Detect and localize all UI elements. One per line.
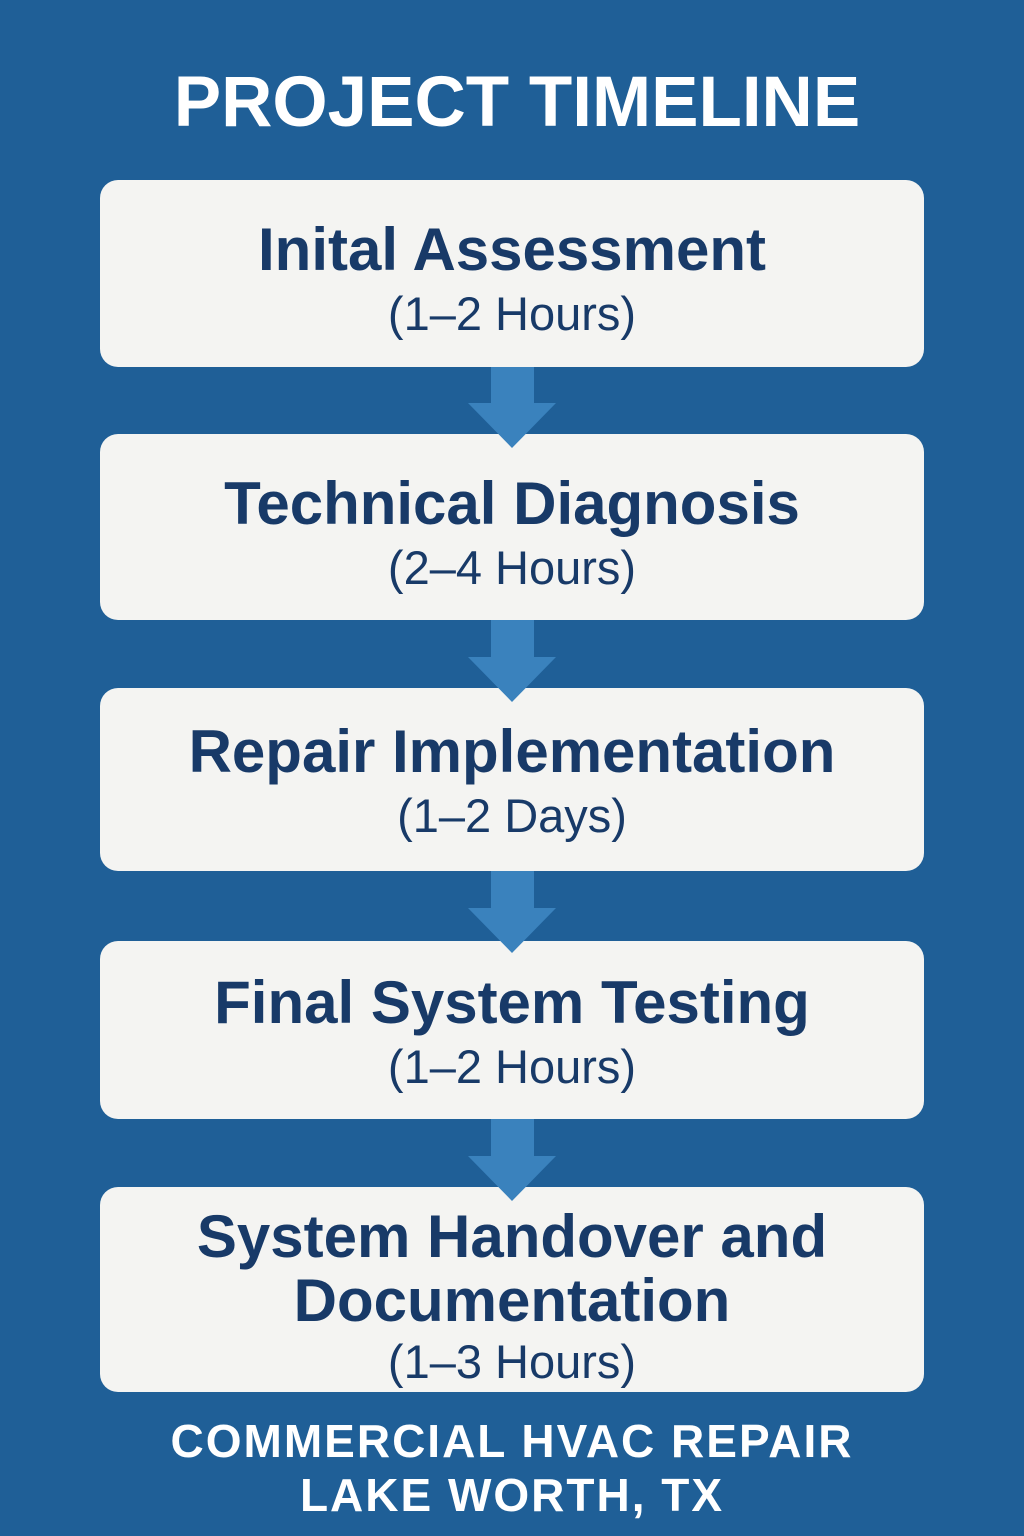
panel: step 5: Documentation [294, 1267, 730, 1334]
footer [171, 1415, 853, 1521]
panel: step 4: (1–2 Hours) [388, 1040, 636, 1093]
arrow 1 [468, 367, 556, 448]
panel: step 5: (1–3 Hours) [388, 1335, 636, 1388]
panel: step 2: (2–4 Hours) [388, 541, 636, 594]
panel: step 3: (1–2 Days) [397, 789, 627, 842]
panel: step 1: (1–2 Hours) [388, 287, 636, 340]
panel: step 3 [100, 688, 924, 871]
panel: step 5 [100, 1187, 924, 1392]
panel: step 4: Final System Testing [214, 969, 810, 1036]
panel: step 5: System Handover and [197, 1203, 827, 1270]
panel: step 2 [100, 434, 924, 620]
panel: step 1 [100, 180, 924, 367]
panel: step 3: Repair Implementation [189, 718, 835, 785]
panel: step 4 [100, 941, 924, 1119]
title: PROJECT TIMELINE [174, 63, 860, 142]
panel: step 2: Technical Diagnosis [224, 470, 800, 537]
arrow 3 [468, 871, 556, 953]
footer: COMMERCIAL HVAC REPAIR [171, 1415, 853, 1467]
arrow 2 [468, 620, 556, 702]
arrow 4 [468, 1119, 556, 1201]
panel: step 1: Inital Assessment [258, 216, 766, 283]
footer: LAKE WORTH, TX [300, 1469, 724, 1521]
